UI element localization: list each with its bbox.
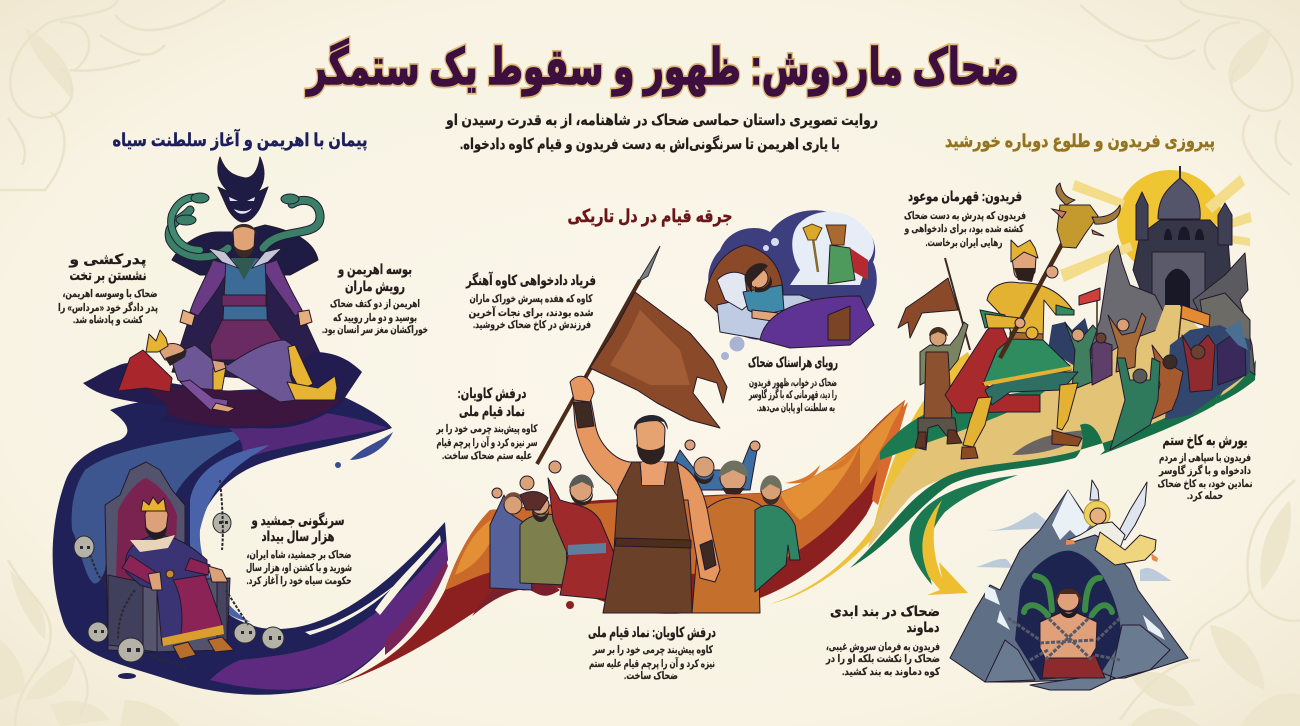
mountain: [950, 490, 1188, 690]
text block: eternal chains: کوه دماوند به بند کشید.: [842, 666, 941, 678]
text block: Zahhak's dream: را دید، قهرمانی که با گرز گاوسر: [748, 388, 837, 401]
ornament: top-left corner: [0, 0, 225, 190]
text block: Fereydun: کشته شده بود، برای دادخواهی و: [904, 223, 1024, 235]
text block: Kaveh's cry: شده بودند، برای نجات آخرین: [468, 306, 594, 319]
flowing ribbon: dark purple tyranny stream: [53, 389, 448, 695]
text block: Ahriman's kiss: بوسید و دو مار رویید که: [333, 312, 417, 324]
text block: Jamshid overthrown: حکومت سیاه خود را آغاز کرد.: [246, 574, 352, 587]
ornament: top-right corner: [1080, 0, 1292, 195]
text block: Fereydun: فریدون که پدرش به دست ضحاک: [904, 210, 1026, 222]
scene: sun and ruined palace: [898, 166, 1255, 459]
sun with rays: [1060, 170, 1252, 282]
text block: Zahhak's dream: [748, 354, 838, 414]
text block: eternal chains: فریدون به فرمان سروش غیبی،: [826, 641, 940, 653]
text block: Kaveh's cry: فرزندش در کاخ ضحاک خروشید.: [473, 319, 591, 331]
angel Sorush: [1066, 480, 1158, 565]
text block: eternal chains: ضحاک در بند ابدی: [830, 603, 940, 619]
text block: Kaviani banner left: سر نیزه کرد و آن را پرچم قیام: [436, 436, 538, 449]
chained Zahhak: [1008, 576, 1120, 678]
thought bubble: Zahhak's dream: [705, 210, 877, 360]
text block: Kaviani banner left: درفش کاویان:: [458, 385, 526, 402]
dream of Fereydun: [803, 224, 868, 284]
crowd behind: [490, 440, 800, 613]
cheering crowd: [1048, 313, 1250, 450]
text block: Fereydun: [904, 188, 1026, 249]
text block: Fereydun: رهایی ایران برخاست.: [926, 237, 1002, 249]
text block: eternal chains: دماوند: [906, 619, 940, 636]
throne: [105, 462, 230, 652]
text block: Kaviani banner left: نماد قیام ملی: [459, 403, 525, 419]
text block: attack on the palace: دادخواه و با گرز گاوسر: [1158, 464, 1251, 477]
text block: Kaveh's cry: فریاد دادخواهی کاوه آهنگر: [465, 271, 596, 289]
king: [122, 497, 234, 659]
text block: patricide: نشستن بر تخت: [70, 267, 146, 284]
text block: attack on the palace: نمادین خود، به کاخ ضحاک: [1158, 478, 1253, 490]
flowing ribbon: fiery uprising stream: [333, 400, 905, 686]
flowing ribbon and hill: victory road: [770, 290, 1256, 604]
text block: Ahriman's kiss: رویش ماران: [345, 278, 405, 295]
text block: eternal chains: [825, 603, 941, 678]
text block: attack on the palace: یورش به کاخ ستم: [1162, 432, 1248, 449]
clouds: [976, 512, 1172, 581]
text block: Jamshid overthrown: سرنگونی جمشید و: [251, 512, 344, 529]
heading: middle section: جرقه قیام در دل تاریکی: [568, 206, 732, 227]
text block: Kaveh's cry: کاوه که هفده پسرش خوراک ماران: [470, 293, 593, 305]
text block: attack on the palace: [1158, 432, 1253, 502]
title: [305, 38, 1019, 97]
palace: [1133, 166, 1232, 315]
ornament: bottom-right corner: [1120, 480, 1300, 726]
heading: right section: پیروزی فریدون و طلوع دوباره خورشید: [945, 131, 1215, 152]
ornament: bottom-left corner: [0, 560, 180, 726]
rocks: [1085, 245, 1255, 395]
text block: Ahriman's kiss: بوسه اهریمن و: [337, 261, 412, 278]
skulls and chains: [74, 480, 284, 668]
text block: Kaviani banner left: کاوه پیش‌بند چرمی خود را بر: [436, 423, 538, 435]
text block: Zahhak's dream: به سلطنت او پایان می‌دهد.: [757, 402, 835, 414]
text block: attack on the palace: فریدون با سپاهی از مردم: [1159, 452, 1251, 464]
scene: Kaveh and the banner: [490, 246, 800, 613]
text block: Ahriman's kiss: [322, 261, 428, 336]
text block: Jamshid overthrown: ضحاک بر جمشید، شاه ایران،: [246, 549, 352, 561]
text block: Zahhak's dream: ضحاک در خواب، ظهور فریدون: [749, 377, 837, 389]
dark pool and slain Mardas: [83, 330, 362, 428]
text block: patricide: ضحاک با وسوسه اهریمن،: [62, 288, 158, 300]
text block: patricide: پدرکشی و: [68, 251, 146, 268]
text block: Kaviani banner bottom: کاوه پیش‌بند چرمی خود را بر سر: [592, 644, 714, 656]
curved arrow: [909, 475, 1018, 595]
scene: Jamshid on throne: [74, 462, 284, 668]
text block: Jamshid overthrown: [246, 512, 352, 587]
subtitle: با یاری اهریمن تا سرنگونی‌اش به دست فریدون و قیام کاوه دادخواه.: [460, 135, 840, 153]
text block: Fereydun: فریدون: قهرمان موعود: [908, 188, 1022, 205]
text block: Ahriman's kiss: خوراکشان مغز سر انسان بود.: [322, 324, 428, 336]
text block: Kaviani banner left: علیه ستم ضحاک ساخت.: [442, 450, 532, 462]
scene: Ahriman and Zahhak: [83, 157, 362, 428]
text block: Kaviani banner bottom: درفش کاویان: نماد قیام ملی: [588, 624, 716, 641]
subtitle: [445, 112, 878, 153]
Zahhak standing: [172, 224, 335, 386]
subtitle: روایت تصویری داستان حماسی ضحاک در شاهنامه، از به قدرت رسیدن او: [445, 112, 878, 129]
text block: attack on the palace: حمله کرد.: [1187, 490, 1223, 502]
Ahriman: [172, 157, 318, 275]
text block: Kaveh's cry: [465, 271, 596, 331]
text block: Kaviani banner bottom: نیزه کرد و آن را پرچم قیام علیه ستم: [589, 657, 715, 670]
heading: left section: پیمان با اهریمن و آغاز سلطنت سیاه: [112, 128, 368, 151]
Kaveh the blacksmith: [570, 376, 720, 613]
scene: Zahhak chained in Damavand: [950, 480, 1188, 690]
text block: Ahriman's kiss: اهریمن از دو کتف ضحاک: [330, 298, 420, 310]
text block: Jamshid overthrown: هزار سال بیداد: [262, 528, 334, 545]
text block: Kaviani banner bottom: ضحاک ساخت.: [624, 670, 678, 682]
text block: eternal chains: ضحاک را نکشت بلکه او را در: [825, 653, 940, 665]
text block: Zahhak's dream: رویای هراسناک ضحاک: [748, 354, 838, 371]
text block: patricide: کشت و پادشاه شد.: [73, 314, 144, 326]
flag bearer: [898, 258, 970, 450]
four serpents: [169, 193, 320, 257]
Fereydun hero: [945, 240, 1082, 459]
spear and leather banner: [537, 246, 727, 464]
text block: patricide: [58, 251, 158, 326]
sleeping Zahhak in bed: [705, 245, 874, 348]
banners: [1079, 288, 1210, 345]
text block: Jamshid overthrown: شورید و با کشتن او، هزار سال: [246, 562, 352, 574]
text block: patricide: پدر دادگر خود «مرداس» را: [58, 301, 158, 314]
text block: Kaviani banner bottom: [588, 624, 716, 682]
text block: Kaviani banner left: [436, 385, 538, 462]
ox-headed mace: [1052, 183, 1120, 248]
